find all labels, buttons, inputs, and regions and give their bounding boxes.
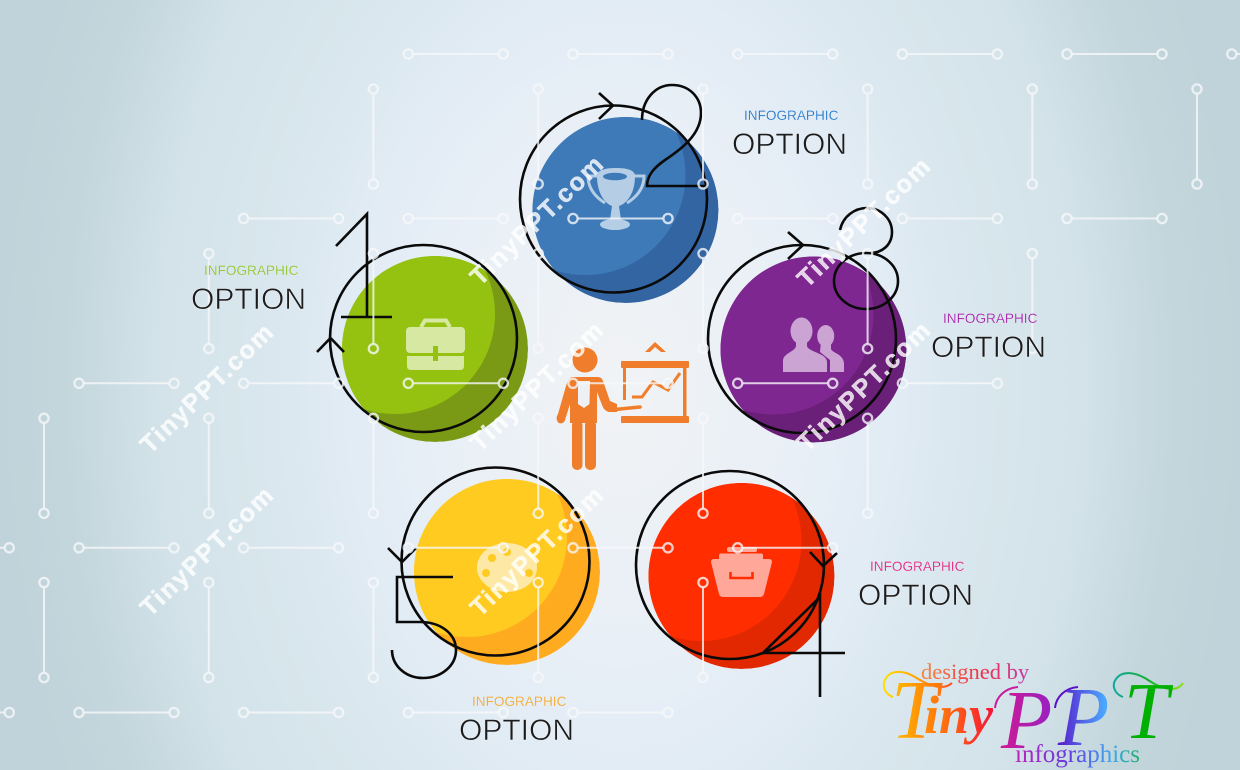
watermark: TinyPPT.com repeated: TinyPPT.com (792, 151, 937, 293)
text block: option 3 label (931, 311, 1046, 364)
text block: option 4 label: OPTION (858, 579, 973, 612)
icon: briefcase (406, 320, 465, 370)
text block: option 2 label: OPTION (732, 128, 847, 161)
number 2 with ring and arrow (520, 85, 707, 292)
text block: option 5 label: OPTION (459, 714, 574, 747)
text block: option 1 label (191, 263, 306, 316)
watermark: TinyPPT.com repeated: TinyPPT.com (465, 315, 610, 457)
panel: option 4 red circle (648, 483, 834, 669)
text block: option 1 label: INFOGRAPHIC (204, 263, 299, 278)
icon: trophy (588, 168, 644, 230)
number 4 with ring and arrow (636, 471, 845, 697)
logo: designed by TinyPPT infographics: T (1124, 668, 1174, 756)
panel: option 5 yellow circle (414, 479, 600, 665)
logo: designed by TinyPPT infographics: T (891, 664, 943, 757)
logo: designed by TinyPPT infographics: P (1057, 671, 1109, 764)
icon: palette (477, 543, 537, 592)
text block: option 2 label (732, 108, 847, 161)
icon: presenter with chart board (557, 342, 689, 470)
panel: option 1 green circle (342, 256, 528, 442)
watermark: TinyPPT.com repeated: TinyPPT.com (792, 315, 937, 457)
logo: designed by TinyPPT infographics: infographics (1015, 741, 1140, 768)
logo: designed by TinyPPT infographics: iny (924, 685, 994, 745)
text block: option 5 label: INFOGRAPHIC (472, 694, 567, 709)
watermark: TinyPPT.com repeated: TinyPPT.com (465, 480, 610, 622)
watermark: TinyPPT.com repeated: TinyPPT.com (135, 480, 280, 622)
text block: option 3 label: OPTION (931, 331, 1046, 364)
watermark: TinyPPT.com repeated: TinyPPT.com (135, 317, 280, 459)
panel: option 2 blue circle (532, 117, 718, 303)
watermark: TinyPPT.com repeated (135, 149, 937, 622)
logo: designed by TinyPPT infographics (884, 659, 1183, 768)
text block: option 1 label: OPTION (191, 283, 306, 316)
number 1 with ring and arrow (317, 214, 517, 432)
number 5 with ring and arrow (388, 468, 590, 678)
logo: designed by TinyPPT infographics: designed by (921, 659, 1030, 684)
text block: option 5 label (459, 694, 574, 747)
watermark: TinyPPT.com repeated: TinyPPT.com (465, 149, 610, 291)
number 3 with ring and arrow (708, 208, 898, 433)
text block: option 3 label: INFOGRAPHIC (943, 311, 1038, 326)
panel: option 3 purple circle (720, 256, 906, 442)
text block: option 4 label (858, 559, 973, 612)
icon: archive box (711, 547, 772, 597)
logo: designed by TinyPPT infographics: P (1000, 674, 1052, 767)
text block: option 2 label: INFOGRAPHIC (744, 108, 839, 123)
icon: people (783, 318, 844, 372)
text block: option 4 label: INFOGRAPHIC (870, 559, 965, 574)
